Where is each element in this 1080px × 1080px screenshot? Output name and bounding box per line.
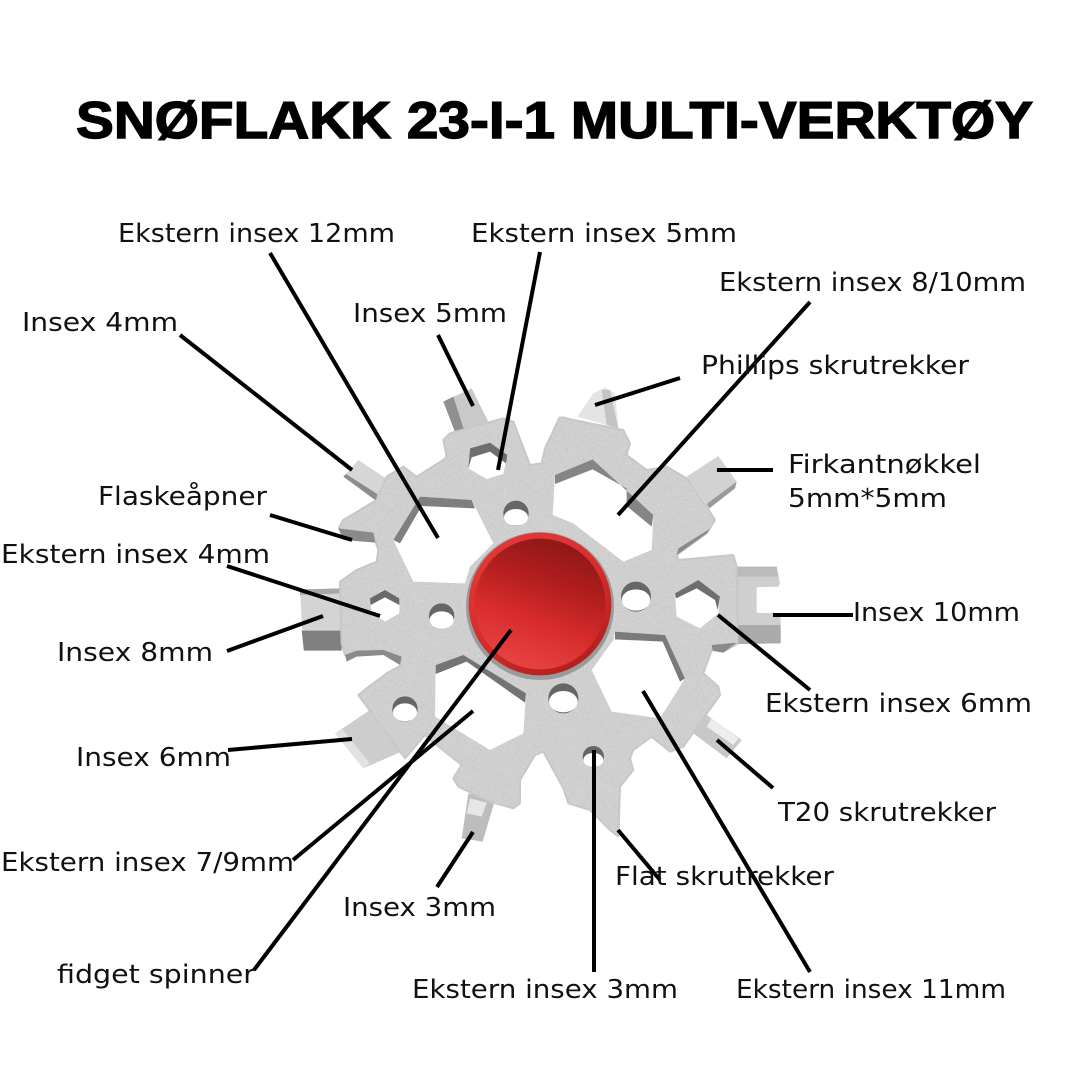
tab: square wrench: [687, 456, 737, 508]
label: ekstern insex 7/9mm: Ekstern insex 7/9mm: [1, 848, 294, 878]
tab: insex 8mm: [300, 588, 342, 651]
line: flat skrutrekker: [618, 830, 660, 880]
label: phillips skrutrekker: Phillips skrutrekker: [701, 351, 969, 381]
fidget spinner button: [466, 532, 614, 680]
line: ekstern insex 8/10mm: [618, 302, 810, 515]
label: insex 5mm: Insex 5mm: [353, 299, 507, 329]
line: phillips: [595, 378, 680, 405]
tab: insex 3mm: [462, 793, 495, 842]
label: insex 8mm: Insex 8mm: [57, 638, 213, 668]
label: firkantnøkkel: [788, 450, 981, 514]
line: insex 3mm: [437, 832, 473, 887]
line: ekstern insex 6mm: [718, 615, 810, 690]
label: insex 6mm: Insex 6mm: [76, 743, 231, 773]
label: ekstern insex 6mm: Ekstern insex 6mm: [765, 689, 1032, 719]
line: ekstern insex 7/9mm: [293, 711, 473, 860]
leader lines: [180, 252, 853, 972]
snowflake multi-tool: [300, 387, 781, 842]
line: insex 6mm: [228, 739, 352, 750]
label: insex 4mm: Insex 4mm: [22, 308, 178, 338]
hole: external hex 7/9mm: [435, 655, 526, 750]
tab: insex 10mm: [737, 567, 781, 644]
label: insex 3mm: Insex 3mm: [343, 893, 496, 923]
edge shadows on notches: [338, 528, 737, 665]
round holes: [392, 501, 651, 767]
label: flaskeåpner: Flaskeåpner: [98, 481, 267, 512]
line: ekstern insex 4mm: [227, 566, 380, 616]
line: insex 8mm: [227, 616, 323, 651]
line: insex 4mm: [180, 335, 352, 470]
line: T20: [717, 740, 773, 788]
label: ekstern insex 5mm: Ekstern insex 5mm: [471, 219, 737, 249]
label: firkantnøkkel: 5mm*5mm: [788, 484, 947, 514]
line: ekstern insex 3mm: [592, 750, 596, 972]
tab: insex 5mm: [443, 388, 488, 432]
label: ekstern insex 12mm: Ekstern insex 12mm: [118, 219, 395, 249]
line: flaskeåpner: [270, 515, 352, 540]
labels: [1, 219, 1032, 1005]
label: ekstern insex 4mm: Ekstern insex 4mm: [1, 540, 270, 570]
line: ekstern insex 12mm: [270, 253, 438, 538]
hole: external hex 5mm: [468, 443, 507, 479]
tab: insex 6mm: [335, 710, 402, 768]
label: flat skrutrekker: Flat skrutrekker: [615, 862, 834, 892]
label: ekstern insex 3mm: Ekstern insex 3mm: [412, 975, 678, 1005]
line: ekstern insex 11mm: [643, 691, 810, 972]
hole: external hex 8/10mm: [553, 459, 653, 562]
title: SNØFLAKK 23-I-1 MULTI-VERKTØY: [76, 92, 1033, 150]
tab: phillips bit: [577, 387, 618, 428]
line: firkantnøkkel: [717, 468, 773, 472]
label: ekstern insex 11mm: Ekstern insex 11mm: [736, 975, 1006, 1005]
hole: external hex 6mm: [675, 580, 720, 628]
hole: external hex 11mm: [592, 632, 685, 718]
label: ekstern insex 8/10mm: Ekstern insex 8/10mm: [719, 268, 1026, 298]
label: fidget spinner: fidget spinner: [57, 960, 255, 990]
hole: external hex 4mm: [370, 590, 399, 622]
line: fidget spinner: [254, 630, 511, 970]
label: T20 skrutrekker: T20 skrutrekker: [777, 798, 996, 828]
tool body: [338, 417, 738, 837]
label: insex 10mm: Insex 10mm: [853, 598, 1020, 628]
line: ekstern insex 5mm: [498, 252, 540, 470]
label: firkantnøkkel: Firkantnøkkel: [788, 450, 981, 480]
tab: insex 4mm: [343, 460, 388, 501]
line: insex 5mm: [438, 335, 473, 406]
hole: external hex 12mm: [393, 497, 493, 583]
line: insex 10mm: [773, 613, 853, 617]
tab: T20 bit: [693, 715, 742, 758]
